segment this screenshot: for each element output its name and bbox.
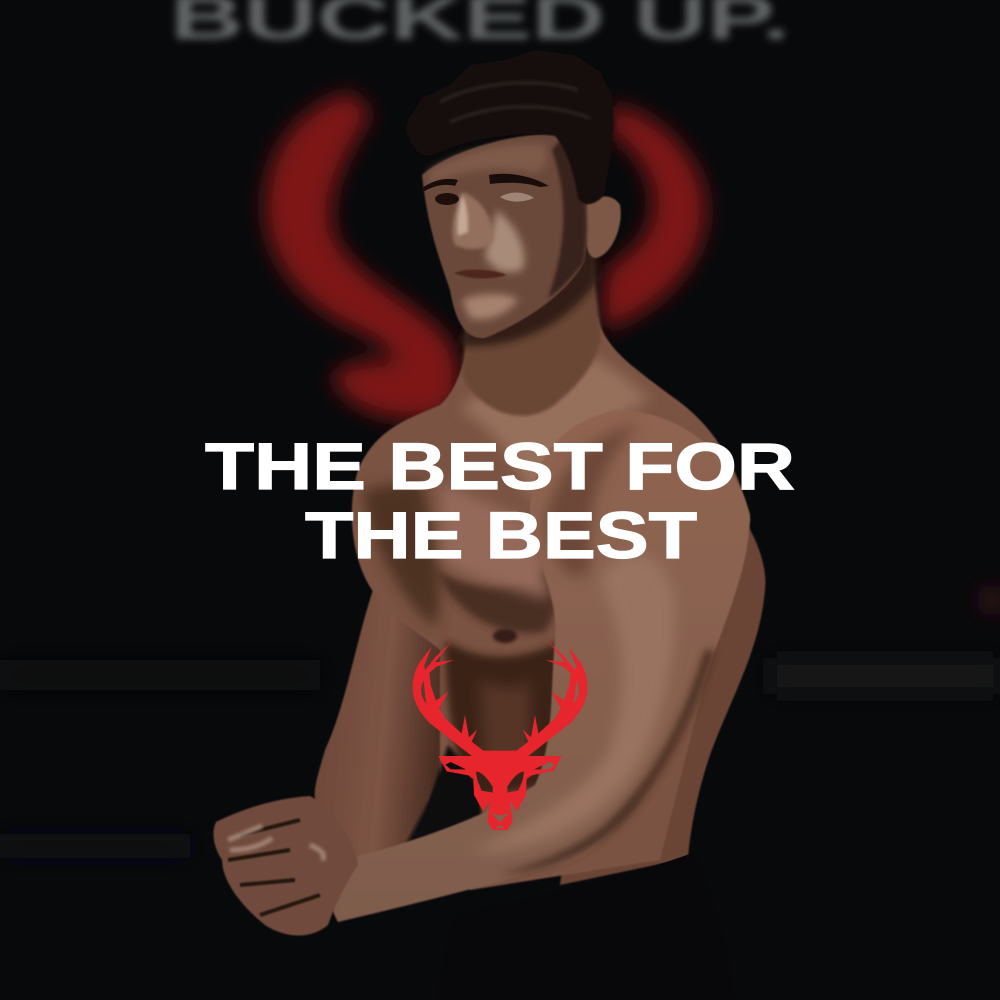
nose	[452, 192, 494, 249]
torso and shoulders	[352, 318, 750, 890]
nipple	[493, 629, 517, 643]
face	[422, 134, 587, 338]
dark gap between arm and torso	[395, 745, 482, 865]
chin highlight	[462, 294, 518, 319]
ear	[585, 196, 621, 258]
lit upper chest	[460, 350, 650, 500]
head	[406, 50, 621, 338]
left antler	[413, 642, 483, 756]
athlete figure	[214, 50, 765, 1000]
far lat and back	[560, 500, 765, 885]
mouth	[454, 270, 507, 279]
clasped hands	[214, 796, 358, 936]
far arm	[315, 575, 448, 870]
near arm	[331, 410, 750, 922]
eyebrows	[421, 179, 458, 192]
near arm shadow	[500, 650, 715, 875]
near arm highlight	[470, 555, 674, 852]
head with ears, eye cutouts and muzzle	[438, 751, 562, 830]
hair	[406, 50, 614, 204]
side shadow	[548, 135, 586, 298]
icon: red stag logo	[413, 642, 587, 830]
shorts	[436, 852, 735, 1000]
headline	[205, 429, 795, 572]
blurred red backdrop logo	[265, 92, 706, 419]
right antler	[517, 642, 587, 756]
abdomen shadow	[445, 640, 562, 800]
cheek highlight	[485, 210, 524, 272]
deltoid shading	[545, 425, 640, 576]
headline line 2: THE BEST	[305, 498, 697, 572]
pectoral shading	[436, 560, 559, 633]
headline line 1: THE BEST FOR	[205, 429, 795, 503]
eyes	[435, 193, 459, 205]
forehead tone	[428, 144, 547, 185]
neck	[462, 240, 601, 416]
blurred floor bands	[0, 584, 1000, 858]
